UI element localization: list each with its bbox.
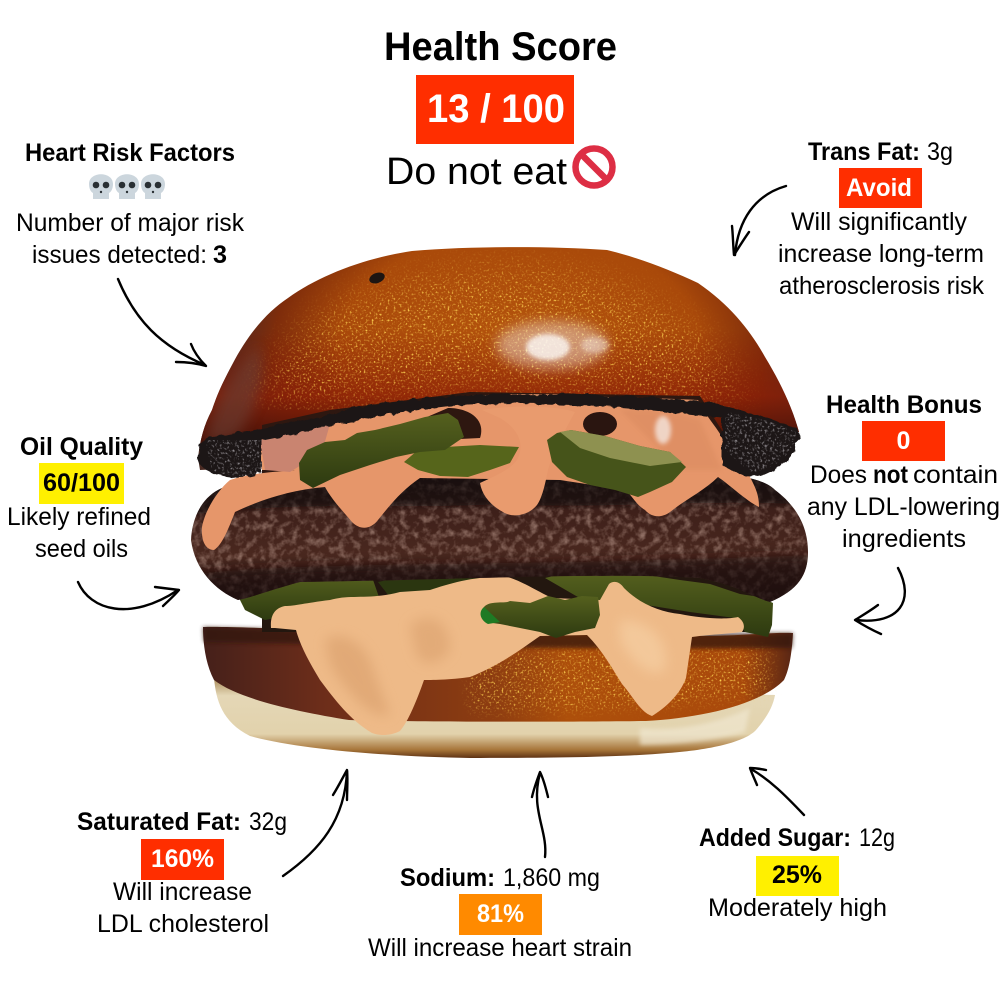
icon: prohibited sign	[576, 148, 612, 186]
description: LDL cholesterol	[97, 910, 269, 938]
top bun crown	[190, 247, 810, 470]
description: issues detected:	[32, 241, 207, 269]
bottom pickles	[240, 572, 773, 637]
description: Will significantly	[791, 208, 967, 236]
badge: avoid	[839, 168, 922, 208]
description: Moderately high	[708, 894, 887, 922]
arrow: oil quality to burger	[78, 582, 179, 609]
heading: added sugar: 12g	[859, 824, 895, 852]
center sauce drip	[480, 406, 575, 515]
description: Will increase	[113, 878, 252, 906]
arrow: health bonus to burger	[855, 568, 905, 634]
icon: three skulls	[89, 174, 165, 199]
description	[778, 208, 984, 300]
panel: trans fat	[778, 138, 984, 300]
description	[16, 209, 244, 269]
heading: saturated fat: 32g	[249, 808, 287, 836]
heading: heart risk factors: Heart Risk Factors	[25, 139, 235, 167]
description	[97, 878, 269, 938]
bottom sauce	[271, 577, 744, 735]
description: not	[873, 461, 909, 489]
badge: 25%	[756, 856, 839, 896]
badge: zero	[862, 421, 945, 461]
top bun charred edge	[198, 394, 799, 478]
description: Will increase heart strain	[368, 934, 632, 962]
heading: sodium: 1,860 mg	[503, 864, 600, 892]
arrow: trans fat to burger	[732, 186, 786, 255]
panel: saturated fat	[77, 808, 287, 938]
shadow behind lower pickles	[262, 570, 760, 632]
score badge: 13 / 100	[427, 87, 565, 131]
dark gap under bun	[262, 392, 728, 478]
description: ingredients	[842, 525, 966, 553]
heading: sodium	[400, 864, 600, 892]
panel: health bonus	[807, 391, 1000, 553]
badge: 81%	[459, 894, 542, 935]
top pickles: left and middle	[299, 413, 519, 488]
badge: 60/100: 60/100	[43, 469, 120, 497]
top pickle: right	[547, 430, 686, 497]
heading: health bonus: Health Bonus	[826, 391, 982, 419]
badge: 81%: 81%	[477, 900, 524, 928]
description	[807, 461, 1000, 553]
heading: trans fat: 3g	[927, 138, 953, 166]
panel: added sugar	[699, 824, 895, 922]
burger illustration	[185, 247, 815, 758]
bottom bun base	[214, 678, 775, 758]
title: Health Score	[384, 25, 617, 69]
panel: sodium	[368, 864, 632, 962]
badge: 160%	[141, 839, 224, 880]
verdict: do not eat: Do not eat	[386, 151, 567, 193]
description: Likely refined	[7, 503, 151, 531]
description: atherosclerosis risk	[779, 272, 984, 300]
description: increase long-term	[778, 240, 984, 268]
panel: heart risk factors	[16, 139, 244, 269]
description	[7, 503, 151, 563]
heading: sodium: Sodium:	[400, 864, 495, 892]
badge: 60/100	[39, 463, 124, 504]
description: seed oils	[35, 535, 128, 563]
description: Number of major risk	[16, 209, 244, 237]
arrow: heart risk to burger	[118, 279, 206, 366]
right drip highlights	[655, 416, 671, 444]
badge: 25%: 25%	[772, 861, 822, 889]
badge: zero: 0	[897, 427, 910, 455]
middle pickle	[481, 596, 600, 638]
bottom bun crust	[203, 627, 793, 722]
description: Does	[810, 461, 867, 489]
description: 3	[213, 241, 227, 269]
heading: oil quality: Oil Quality	[20, 433, 143, 461]
description: contain	[913, 461, 998, 489]
heading: added sugar: Added Sugar:	[699, 824, 851, 852]
description: any LDL-lowering	[807, 493, 1000, 521]
heading: trans fat: Trans Fat:	[808, 138, 920, 166]
panel: oil quality	[7, 433, 151, 563]
arrow: sodium to burger	[532, 772, 548, 857]
beef patty	[191, 478, 808, 602]
badge: 160%: 160%	[151, 845, 214, 873]
score badge	[416, 75, 574, 144]
arrow: saturated fat to burger	[283, 770, 347, 876]
heading: saturated fat: Saturated Fat:	[77, 808, 241, 836]
arrow: added sugar to burger	[750, 768, 804, 815]
badge: avoid: Avoid	[846, 174, 912, 202]
back sauce	[202, 394, 759, 550]
